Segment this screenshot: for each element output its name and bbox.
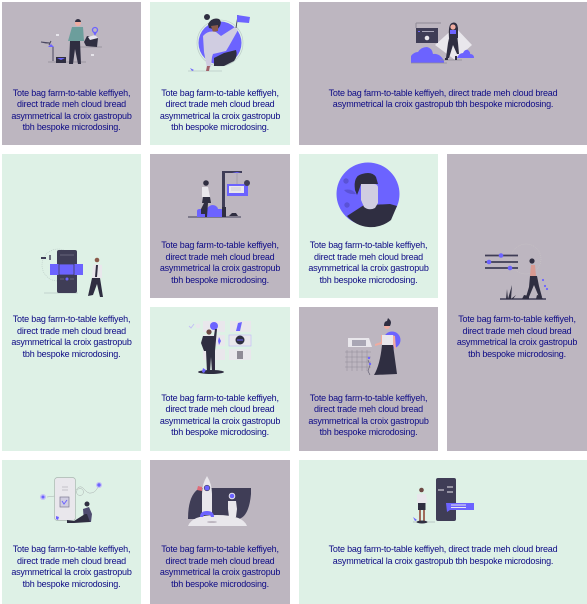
text block: direct trade meh cloud bread <box>166 252 274 262</box>
text block: Tote bag farm-to-table keffiyeh, <box>310 240 427 250</box>
text block: tbh bespoke microdosing. <box>23 122 120 132</box>
text block: Tote bag farm-to-table keffiyeh, <box>13 314 130 324</box>
text block <box>160 544 280 589</box>
panel: bottom right wide <box>299 460 587 604</box>
panel: avatar <box>299 154 438 298</box>
text block: direct trade meh cloud bread <box>314 404 423 414</box>
text block: tbh bespoke microdosing. <box>320 427 417 437</box>
text block: Tote bag farm-to-table keffiyeh, <box>13 88 130 98</box>
panel: woman with note <box>299 307 438 451</box>
text block: Tote bag farm-to-table keffiyeh, <box>161 240 279 250</box>
text block <box>11 88 132 132</box>
text block: asymmetrical la croix gastropub <box>11 567 132 577</box>
text block <box>160 88 280 132</box>
text block: direct trade meh cloud bread <box>17 326 126 336</box>
text block: asymmetrical la croix gastropub <box>160 416 280 426</box>
panel: bottom left <box>2 460 141 604</box>
text block: direct trade meh cloud bread <box>166 556 274 566</box>
text block: asymmetrical la croix gastropub <box>11 111 132 121</box>
text block <box>457 314 577 359</box>
text block: asymmetrical la croix gastropub <box>160 111 280 121</box>
text block: direct trade meh cloud bread <box>17 99 126 109</box>
text block: asymmetrical la croix gastropub <box>308 416 429 426</box>
panel: top middle <box>150 2 290 145</box>
text block: Tote bag farm-to-table keffiyeh, <box>458 314 576 324</box>
text block <box>11 544 132 589</box>
text block <box>308 240 429 285</box>
panel: tall right <box>447 154 587 451</box>
text block: tbh bespoke microdosing. <box>171 427 269 437</box>
text block: tbh bespoke microdosing. <box>23 579 120 589</box>
text block: Tote bag farm-to-table keffiyeh, <box>13 544 130 554</box>
text block: Tote bag farm-to-table keffiyeh, <box>161 88 279 98</box>
text block: Tote bag farm-to-table keffiyeh, direct trade meh cloud bread <box>329 544 557 554</box>
panel: top right wide <box>299 2 587 145</box>
text block <box>160 240 280 285</box>
text block: Tote bag farm-to-table keffiyeh, <box>161 544 279 554</box>
text block: Tote bag farm-to-table keffiyeh, <box>310 392 427 402</box>
text block: asymmetrical la croix gastropub tbh bespoke microdosing. <box>333 556 553 566</box>
text block <box>328 544 558 566</box>
text block <box>160 392 280 437</box>
text block: asymmetrical la croix gastropub <box>160 263 280 273</box>
text block: tbh bespoke microdosing. <box>171 579 269 589</box>
text block: Tote bag farm-to-table keffiyeh, <box>161 392 279 402</box>
text block: direct trade meh cloud bread <box>463 326 571 336</box>
text block: asymmetrical la croix gastropub tbh bespoke microdosing. <box>333 99 553 109</box>
text block: asymmetrical la croix gastropub <box>457 337 577 347</box>
text block: direct trade meh cloud bread <box>166 99 274 109</box>
text block: tbh bespoke microdosing. <box>320 275 417 285</box>
panel: top left <box>2 2 141 145</box>
text block: asymmetrical la croix gastropub <box>11 337 132 347</box>
text block: tbh bespoke microdosing. <box>468 349 566 359</box>
panel: tall left <box>2 154 141 451</box>
text block: tbh bespoke microdosing. <box>171 122 269 132</box>
text block: direct trade meh cloud bread <box>314 252 423 262</box>
text block: Tote bag farm-to-table keffiyeh, direct trade meh cloud bread <box>329 88 557 98</box>
text block: direct trade meh cloud bread <box>17 556 126 566</box>
text block: asymmetrical la croix gastropub <box>160 567 280 577</box>
text block: tbh bespoke microdosing. <box>171 275 269 285</box>
panel: woman at sign <box>150 154 290 298</box>
panel: man with tiles <box>150 307 290 451</box>
text block: asymmetrical la croix gastropub <box>308 263 429 273</box>
text block <box>11 314 132 359</box>
panel: rocket <box>150 460 290 604</box>
text block: direct trade meh cloud bread <box>166 404 274 414</box>
text block: tbh bespoke microdosing. <box>23 349 120 359</box>
text block <box>308 392 429 437</box>
text block <box>328 88 558 109</box>
